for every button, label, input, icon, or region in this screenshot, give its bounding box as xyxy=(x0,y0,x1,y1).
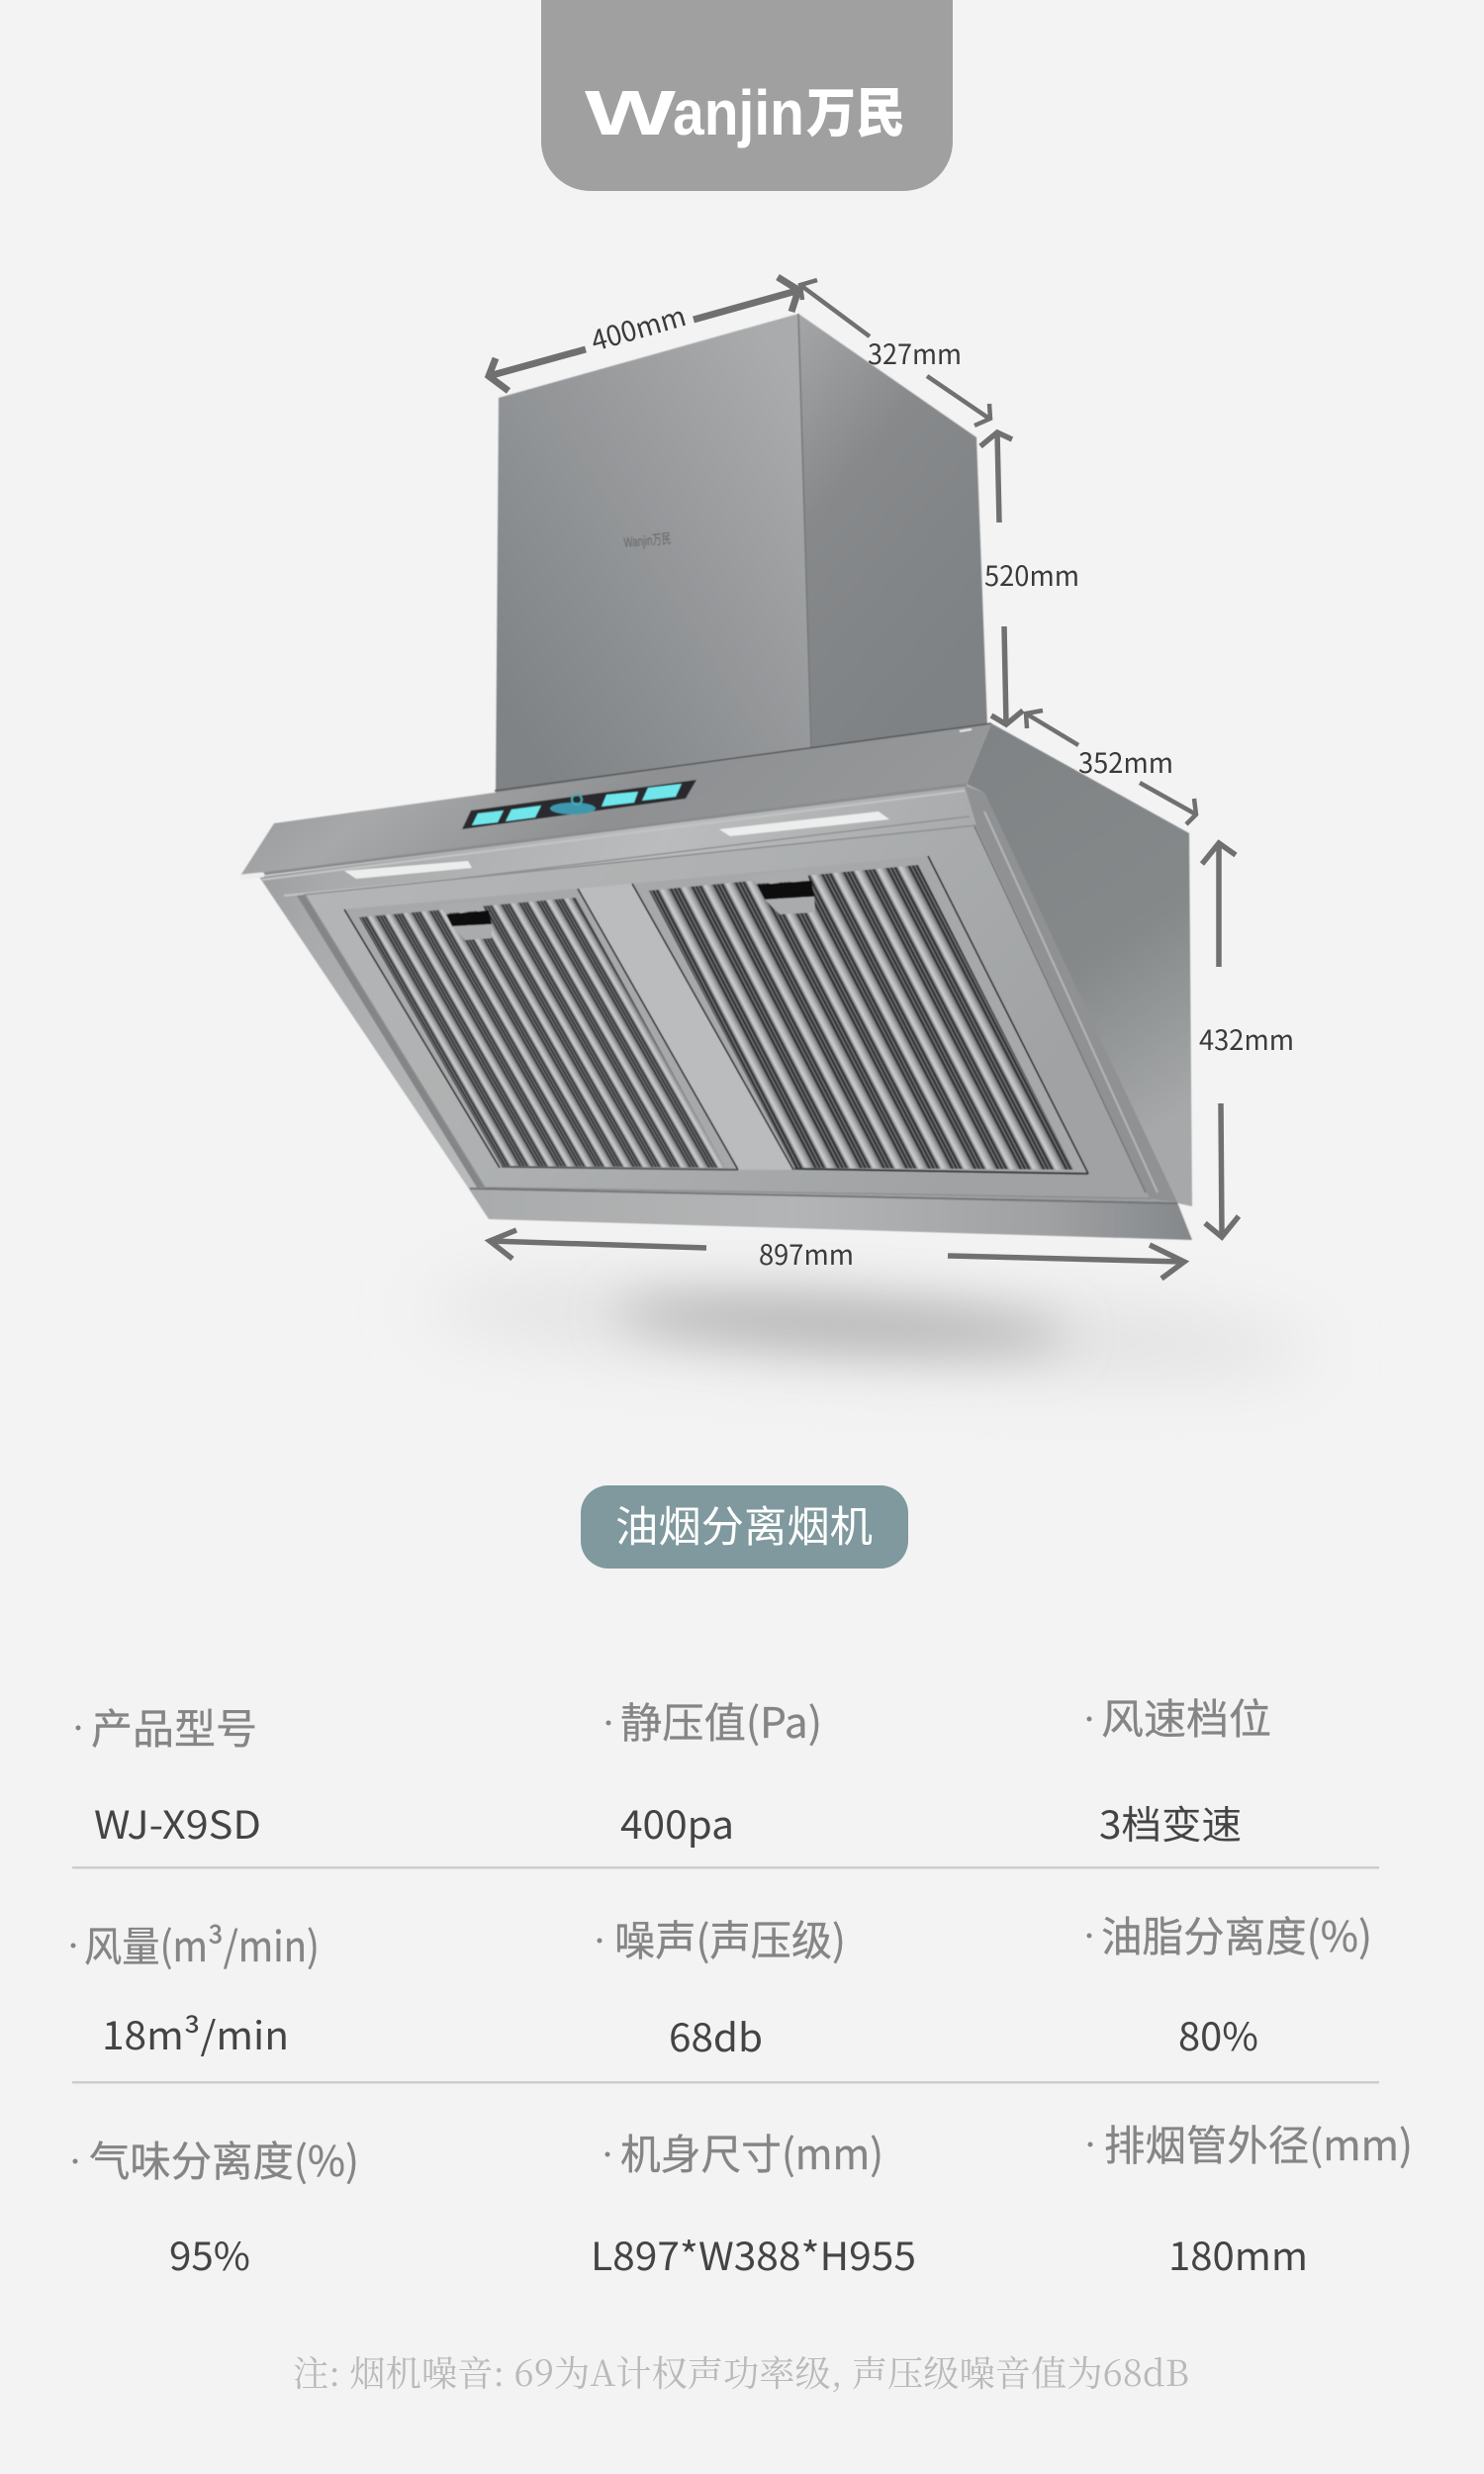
spec: air flow: 风量(m³/min) xyxy=(84,1914,320,1974)
label: 352mm: 352mm xyxy=(1078,742,1173,782)
label: 432mm: 432mm xyxy=(1199,1019,1294,1059)
dimension arrow: 520mm xyxy=(980,432,1023,724)
label: 327mm: 327mm xyxy=(868,333,962,373)
footnote: 注: 烟机噪音: 69为A计权声功率级, 声压级噪音值为68dB xyxy=(293,2346,1189,2397)
logo badge xyxy=(541,0,953,191)
spec: product model xyxy=(75,1696,261,1851)
spec: grease separation: 油脂分离度(%) xyxy=(1101,1904,1372,1964)
spec: grease separation xyxy=(1086,1904,1372,2062)
right light xyxy=(719,811,889,836)
left light xyxy=(344,861,472,879)
chimney side face xyxy=(798,314,987,752)
left filter slats xyxy=(359,898,725,1168)
row divider 1 xyxy=(72,1866,1379,1868)
spec: static pressure: 静压值(Pa) xyxy=(620,1690,822,1751)
right filter slats xyxy=(649,865,1073,1170)
spec: grease separation: 80% xyxy=(1178,2007,1258,2062)
product name pill xyxy=(581,1485,908,1569)
chimney logo: Wanjin万民 xyxy=(623,530,672,550)
spec: product model: WJ-X9SD xyxy=(94,1795,261,1851)
spec: static pressure: 400pa xyxy=(620,1795,734,1851)
spec: noise: 噪声(声压级) xyxy=(614,1908,846,1968)
spec: air flow: 18m³/min xyxy=(102,2006,289,2061)
dimension arrow: 897mm xyxy=(490,1230,1184,1279)
spec: odor separation: 气味分离度(%) xyxy=(89,2129,359,2189)
spec: static pressure xyxy=(605,1690,822,1851)
label: 897mm: 897mm xyxy=(759,1234,854,1274)
spec: body size: 机身尺寸(mm) xyxy=(620,2122,883,2182)
floor shadow xyxy=(424,1266,1317,1390)
hood underside xyxy=(259,784,1177,1202)
label: 520mm: 520mm xyxy=(984,555,1079,595)
dimension arrow: 327mm xyxy=(800,280,990,426)
chimney front face xyxy=(496,314,811,797)
front lip xyxy=(468,1188,1192,1240)
logo badge: anjin xyxy=(673,77,804,148)
spec: body size: L897*W388*H955 xyxy=(591,2227,916,2282)
row divider 2 xyxy=(72,2081,1379,2084)
logo badge: 万民 xyxy=(806,69,905,147)
spec: air flow xyxy=(71,1914,320,2061)
left filter frame xyxy=(344,889,738,1170)
spec: noise xyxy=(598,1908,846,2063)
hood side panel xyxy=(967,723,1192,1206)
label: 400mm: 400mm xyxy=(586,295,691,360)
chrome tip xyxy=(242,875,262,877)
spec: product model: 产品型号 xyxy=(91,1696,257,1757)
dimension arrow: 352mm xyxy=(1026,711,1196,824)
spec: fan speed: 风速档位 xyxy=(1101,1686,1271,1747)
dimension arrow: 400mm xyxy=(489,277,798,391)
spec: odor separation: 95% xyxy=(169,2227,250,2282)
control panel xyxy=(462,780,696,829)
spec: noise: 68db xyxy=(669,2008,763,2063)
left filter handle xyxy=(439,901,492,940)
dimension arrow: 432mm xyxy=(1202,843,1239,1237)
spec: duct diameter: 180mm xyxy=(1168,2227,1308,2282)
spec: duct diameter xyxy=(1088,2113,1413,2282)
hood top sloped panel xyxy=(240,723,991,876)
spec: odor separation xyxy=(73,2129,359,2282)
center panel between filters xyxy=(578,884,793,1170)
right filter frame xyxy=(632,856,1088,1174)
spec: body size xyxy=(591,2122,916,2282)
logo badge: W xyxy=(585,77,677,148)
right frame strip xyxy=(965,786,1177,1202)
right filter handle xyxy=(749,869,815,914)
underside inner plate xyxy=(305,825,1151,1198)
spec: fan speed xyxy=(1086,1686,1271,1851)
left dark strip xyxy=(297,895,485,1188)
range hood product xyxy=(240,314,1192,1240)
product name pill: 油烟分离烟机 xyxy=(615,1493,873,1555)
spec: duct diameter: 排烟管外径(mm) xyxy=(1104,2113,1413,2173)
mini mark on hood xyxy=(960,729,972,731)
spec: fan speed: 3档变速 xyxy=(1099,1795,1242,1851)
